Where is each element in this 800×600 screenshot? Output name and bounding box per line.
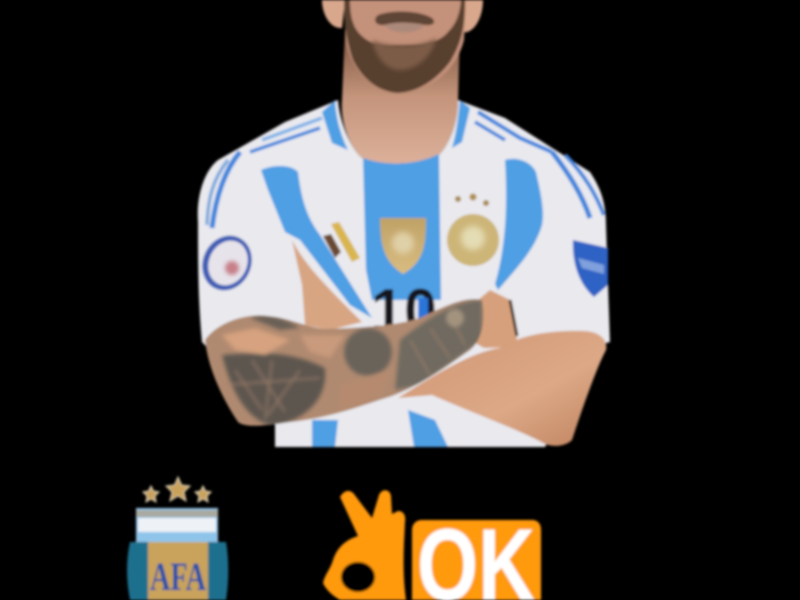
- head and neck: [322, 0, 483, 164]
- AFA crest logo: [127, 477, 228, 600]
- shoulder stripes: [207, 112, 604, 228]
- gold stripe patch: [331, 222, 360, 262]
- upper arm skin at chest: [292, 240, 362, 330]
- beard: [344, 0, 465, 93]
- gold badge: [380, 218, 426, 274]
- crest shield: [127, 542, 228, 600]
- ok hand hole: [341, 562, 375, 592]
- crest letters: AFA: [150, 554, 206, 599]
- jersey: [193, 100, 610, 447]
- icon: ok hand: [323, 490, 406, 600]
- ok badge: [412, 520, 541, 600]
- player photo: [193, 0, 610, 447]
- jersey blue stripes: [261, 100, 543, 447]
- tattooed forearm: [205, 299, 484, 426]
- AFA chest crest: [447, 194, 499, 266]
- number 10: 10: [371, 277, 437, 346]
- right arm: [398, 331, 606, 446]
- right sleeve badge: [573, 240, 608, 297]
- dark mark: [323, 234, 341, 258]
- crest flag stripes: [136, 508, 218, 542]
- crest stars: [143, 477, 211, 502]
- left sleeve badge: [193, 227, 261, 299]
- OK logo: [323, 490, 541, 600]
